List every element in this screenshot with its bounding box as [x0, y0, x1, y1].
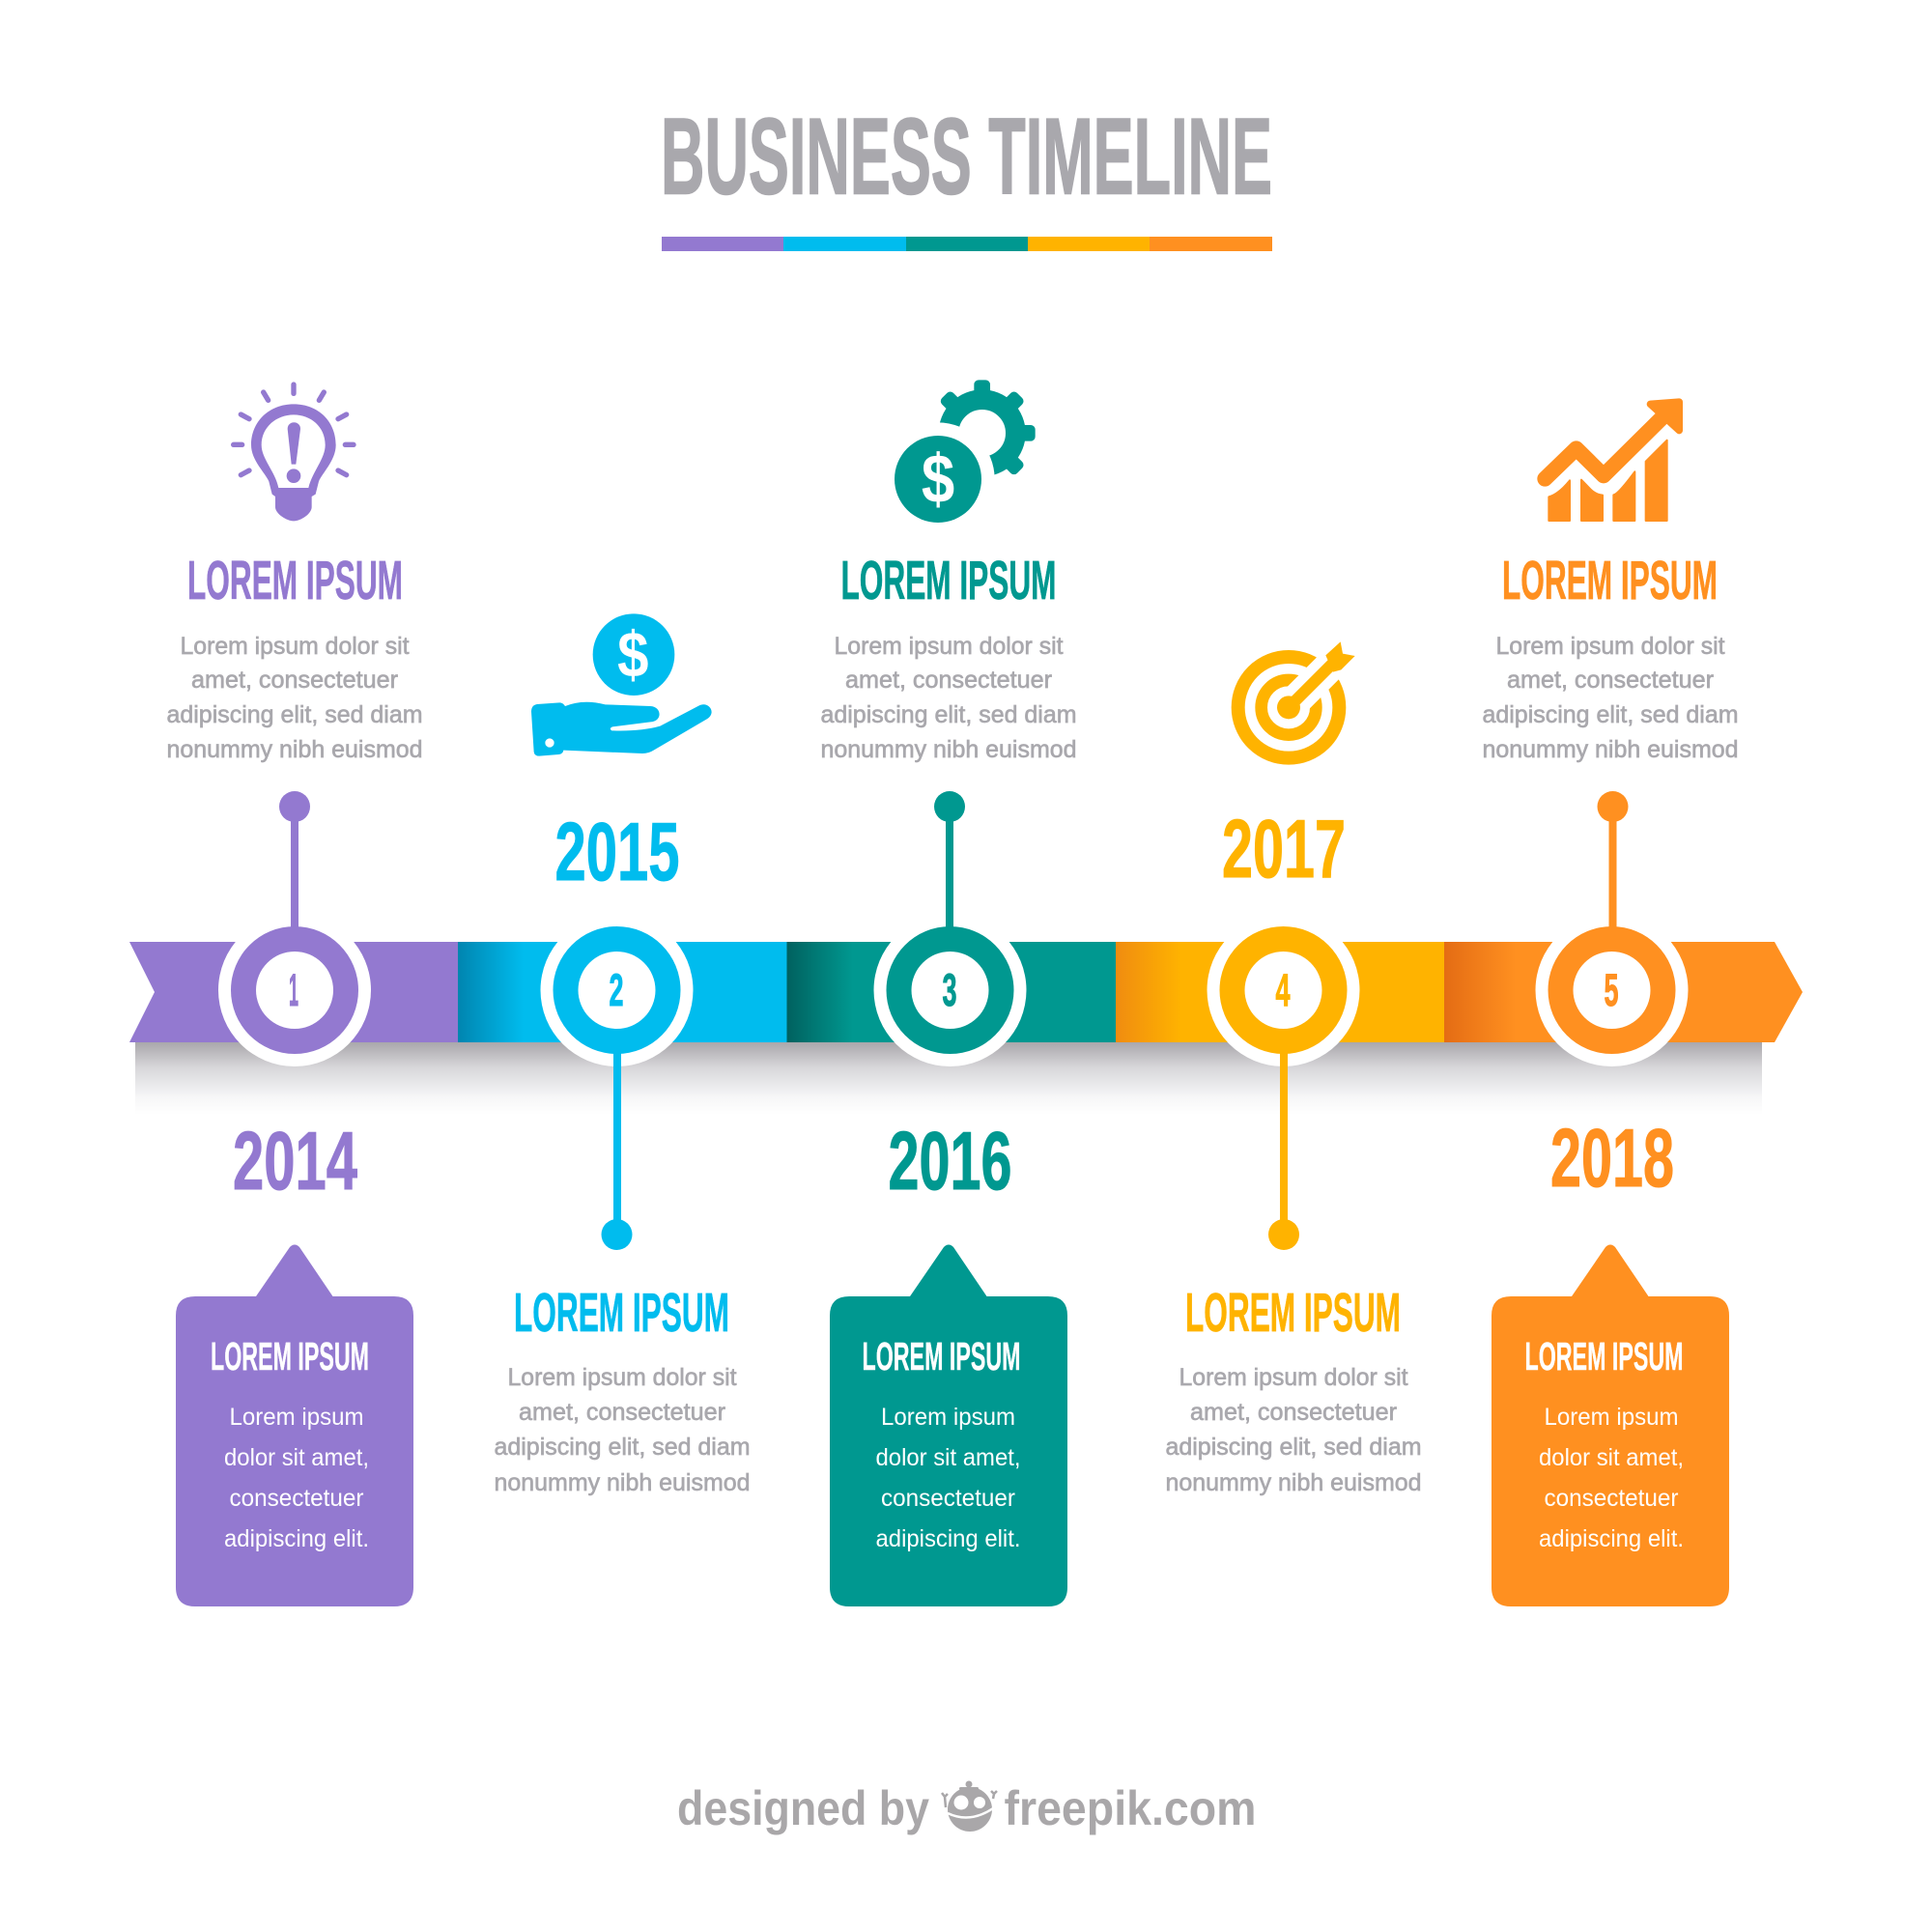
icon: light bulb — [234, 384, 354, 521]
column 4 heading: LOREM IPSUM — [1185, 1282, 1401, 1344]
panel: card 1 — [176, 1244, 413, 1606]
milestone 4 pin and badge: 4 — [1275, 964, 1291, 1015]
column 5 text: Lorem ipsum dolor sit — [1495, 633, 1725, 660]
title: BUSINESS TIMELINE — [661, 95, 1272, 216]
column 4 text: amet, consectetuer — [1190, 1399, 1397, 1426]
footer credit: designed by — [677, 1781, 929, 1835]
panel: card 5 — [1492, 1244, 1729, 1606]
column 2 text — [495, 1364, 750, 1496]
milestone 5 pin and badge: 5 — [1604, 964, 1619, 1015]
timeline ribbon — [129, 942, 1803, 1042]
milestone 5 pin and badge — [1536, 791, 1689, 1066]
column 3 text: Lorem ipsum dolor sit — [835, 633, 1064, 660]
icon: gear with dollar coin: $ — [922, 440, 954, 518]
column 1 text: nonummy nibh euismod — [166, 736, 423, 763]
panel: card 5: Lorem ipsum — [1544, 1404, 1679, 1431]
panel: card 3: Lorem ipsum — [881, 1404, 1015, 1431]
milestone 3 pin and badge: 3 — [943, 964, 956, 1015]
panel: card 5: dolor sit amet, — [1539, 1444, 1684, 1471]
ribbon shadow — [135, 1042, 1762, 1115]
column 1 heading: LOREM IPSUM — [187, 550, 403, 611]
column 1 text: adipiscing elit, sed diam — [166, 701, 423, 728]
year 2018: 2018 — [1550, 1113, 1674, 1205]
panel: card 1: adipiscing elit. — [224, 1525, 369, 1552]
panel: card 3 — [830, 1244, 1067, 1606]
milestone 4 pin and badge — [1208, 914, 1360, 1250]
milestone 3 pin and badge — [873, 791, 1026, 1066]
column 1 text: Lorem ipsum dolor sit — [180, 633, 410, 660]
footer credit: freepik.com — [1005, 1781, 1256, 1835]
column 4 text: nonummy nibh euismod — [1165, 1469, 1422, 1496]
icon: freepik robot — [942, 1781, 997, 1832]
column 5 text: adipiscing elit, sed diam — [1482, 701, 1739, 728]
column 5 text: amet, consectetuer — [1507, 667, 1714, 694]
column 3 heading: LOREM IPSUM — [840, 550, 1057, 611]
panel: card 1: consectetuer — [230, 1485, 363, 1512]
panel: card 5: LOREM IPSUM — [1524, 1334, 1683, 1378]
year 2014: 2014 — [233, 1116, 357, 1208]
milestone 2 pin and badge: 2 — [609, 964, 624, 1015]
column 5 text: nonummy nibh euismod — [1482, 736, 1739, 763]
panel: card 5: adipiscing elit. — [1539, 1525, 1684, 1552]
icon: gear with dollar coin — [881, 380, 1036, 536]
footer credit — [677, 1781, 1256, 1835]
column 3 text: amet, consectetuer — [845, 667, 1052, 694]
milestone 2 pin and badge — [541, 914, 694, 1250]
column 3 text: adipiscing elit, sed diam — [821, 701, 1076, 728]
icon: hand holding coin — [531, 613, 712, 756]
column 5 heading: LOREM IPSUM — [1502, 550, 1718, 611]
column 3 text — [821, 633, 1076, 763]
milestone 1 pin and badge — [218, 791, 371, 1066]
column 2 text: nonummy nibh euismod — [495, 1469, 750, 1496]
year 2015: 2015 — [554, 807, 680, 898]
panel: card 5: consectetuer — [1544, 1485, 1679, 1512]
title colour bar — [662, 237, 1272, 251]
column 1 text — [166, 633, 423, 763]
column 2 text: amet, consectetuer — [519, 1399, 725, 1426]
column 2 heading: LOREM IPSUM — [514, 1282, 729, 1344]
icon: hand holding coin: $ — [617, 620, 648, 692]
year 2017: 2017 — [1222, 804, 1346, 895]
column 1 text: amet, consectetuer — [191, 667, 398, 694]
column 3 text: nonummy nibh euismod — [821, 736, 1076, 763]
panel: card 3: dolor sit amet, — [875, 1444, 1020, 1471]
column 2 text: Lorem ipsum dolor sit — [508, 1364, 737, 1391]
year 2016: 2016 — [889, 1116, 1012, 1208]
panel: card 1: Lorem ipsum — [230, 1404, 363, 1431]
icon: rising bar chart — [1545, 402, 1679, 521]
icon: target with arrow — [1238, 641, 1355, 758]
column 5 text — [1482, 633, 1739, 763]
column 4 text: adipiscing elit, sed diam — [1165, 1434, 1422, 1461]
column 2 text: adipiscing elit, sed diam — [495, 1434, 750, 1461]
milestone 1 pin and badge: 1 — [289, 964, 298, 1015]
panel: card 3: LOREM IPSUM — [862, 1334, 1020, 1378]
panel: card 1: dolor sit amet, — [224, 1444, 369, 1471]
panel: card 3: adipiscing elit. — [875, 1525, 1020, 1552]
column 4 text: Lorem ipsum dolor sit — [1179, 1364, 1408, 1391]
panel: card 3: consectetuer — [881, 1485, 1015, 1512]
panel: card 1: LOREM IPSUM — [211, 1334, 369, 1378]
column 4 text — [1165, 1364, 1422, 1496]
